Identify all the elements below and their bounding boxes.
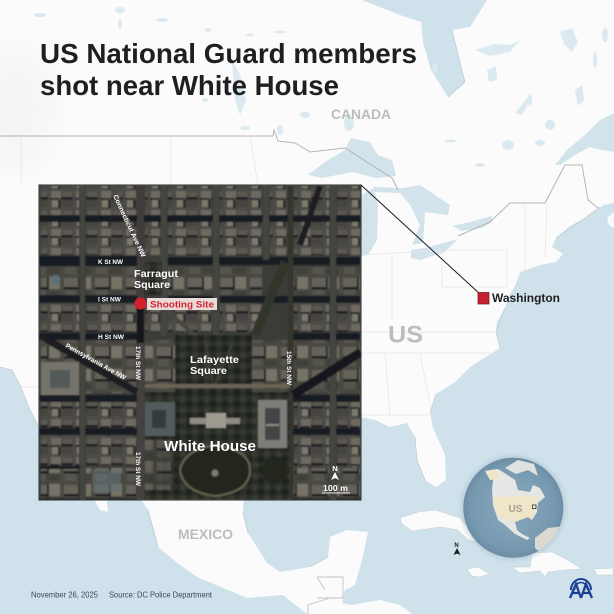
globe: US label: US bbox=[509, 504, 523, 515]
street labels bbox=[64, 194, 292, 487]
street labels: Connecticut Ave NW bbox=[111, 194, 147, 259]
inset: Lafayette Square bbox=[145, 335, 290, 392]
globe: land bbox=[485, 469, 545, 540]
map: Nova Scotia bbox=[607, 212, 614, 228]
place label: White House: White House bbox=[164, 438, 256, 455]
street labels: 17th St NW bbox=[134, 346, 141, 381]
inset: street base bbox=[39, 185, 361, 500]
map: Great Lakes and large water bodies bbox=[308, 113, 614, 260]
inset: diagonal avenues bbox=[39, 186, 361, 395]
place label: Lafayette Square: Square bbox=[190, 365, 227, 377]
label: Canada: CANADA bbox=[331, 106, 391, 122]
compass: map north arrow bbox=[454, 543, 460, 555]
inset: dark shadowed east-west streets bbox=[39, 215, 361, 500]
locator globe bbox=[461, 456, 565, 560]
inset: city blocks bbox=[41, 186, 360, 467]
map: small lakes bbox=[34, 7, 608, 167]
footer: date: November 26, 2025 bbox=[31, 590, 98, 600]
inset frame bbox=[39, 185, 361, 500]
inset: 17th and 15th Street bbox=[137, 185, 293, 500]
callout line to Washington bbox=[361, 185, 480, 294]
street labels: Pennsylvania Ave NW bbox=[64, 343, 127, 382]
inset: Farragut Square park bbox=[144, 262, 162, 295]
inset: White House grounds bbox=[145, 392, 290, 500]
title: US National Guard members bbox=[40, 38, 417, 69]
street labels: I St NW bbox=[98, 296, 122, 304]
north arrow and scale bar: 100 m bbox=[323, 483, 348, 493]
title: shot near White House bbox=[40, 70, 339, 101]
map: country and state borders bbox=[0, 130, 598, 614]
compass: map north arrow: N bbox=[454, 543, 459, 549]
Washington marker and label: Washington bbox=[492, 293, 560, 305]
satellite inset map bbox=[39, 185, 361, 500]
shooting site marker: Shooting Site bbox=[150, 300, 214, 310]
place label: Farragut Square: Farragut bbox=[134, 268, 179, 280]
inset: large west block with courtyard bbox=[41, 275, 121, 492]
globe: US highlight bbox=[494, 496, 538, 522]
globe: Washington locator bbox=[532, 505, 536, 509]
place label: Lafayette Square: Lafayette bbox=[190, 354, 239, 366]
shooting site marker bbox=[134, 298, 217, 310]
north arrow and scale bar bbox=[322, 464, 350, 493]
label: Mexico: MEXICO bbox=[178, 526, 233, 542]
street labels: K St NW bbox=[98, 259, 124, 266]
logo: Anadolu Agency bbox=[570, 579, 592, 598]
inset: lighter north-south streets bbox=[80, 185, 336, 500]
street labels: 15th St NW bbox=[285, 351, 292, 386]
title bbox=[40, 38, 417, 101]
label: US: US bbox=[388, 322, 423, 348]
street labels: 17th St NW bbox=[134, 452, 141, 487]
place label: Farragut Square bbox=[134, 268, 179, 291]
place label: Farragut Square: Square bbox=[134, 279, 170, 291]
footer: source: Source: DC Police Department bbox=[109, 590, 213, 600]
map: Cuba and Caribbean islands bbox=[400, 510, 613, 577]
place label: Lafayette Square bbox=[190, 354, 239, 377]
map: Rocky Mountain shading bbox=[0, 50, 55, 170]
street labels: H St NW bbox=[98, 334, 125, 341]
north arrow and scale bar: N bbox=[332, 464, 338, 473]
